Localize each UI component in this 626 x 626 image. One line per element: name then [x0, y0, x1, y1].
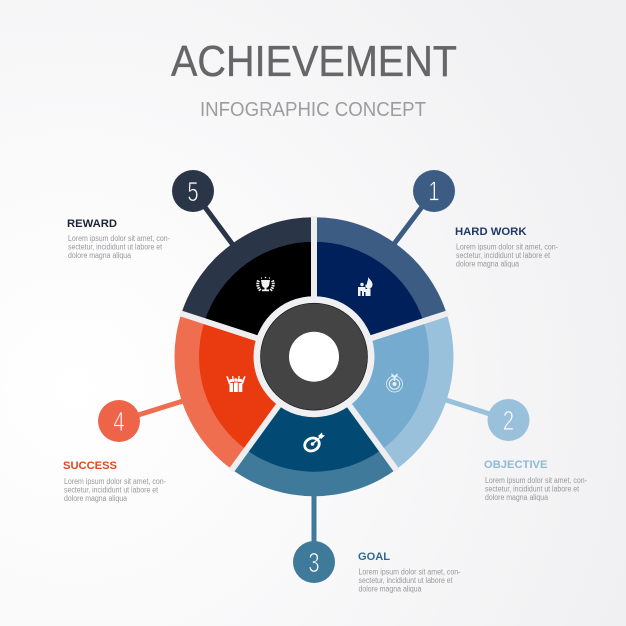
text block: objective: OBJECTIVE: [484, 459, 548, 471]
title: ACHIEVEMENT: [171, 37, 457, 86]
connector 3 with number badge: 3: [308, 548, 320, 579]
connector 4 with number badge: 4: [113, 407, 125, 438]
text block: goal: GOAL: [358, 551, 390, 563]
text block: hard work: Lorem ipsum dolor sit amet, con-: [456, 242, 558, 252]
text block: reward: [67, 218, 170, 260]
text block: reward: REWARD: [67, 218, 117, 230]
connector 2 with number badge: 2: [503, 406, 514, 437]
text block: reward: sectetur, incididunt ut labore et: [68, 242, 163, 252]
icon: trophy with laurels: [258, 277, 273, 291]
segment 5: reward: [181, 217, 314, 357]
segment 3: goal: [232, 357, 396, 496]
segment 2: objective: [314, 314, 453, 470]
icon: group raising arms: [226, 376, 246, 392]
text block: hard work: HARD WORK: [455, 226, 527, 238]
connector 2 with number badge: [446, 399, 530, 441]
center hub: [254, 296, 374, 417]
text block: goal: dolore magna aliqua: [358, 584, 422, 594]
connector 4 with number badge: [98, 400, 183, 442]
icon: person climbing with flame: [358, 277, 372, 296]
text block: goal: [358, 551, 461, 594]
text block: success: dolore magna aliqua: [64, 494, 127, 503]
icon: target arrow light: [386, 373, 402, 392]
icon: target with dart: [303, 432, 325, 453]
text block: success: Lorem ipsum dolor sit amet, con-: [64, 477, 166, 486]
text block: success: [63, 460, 166, 503]
text block: objective: [484, 459, 587, 502]
text block: objective: Lorem ipsum dolor sit amet, con-: [485, 476, 587, 485]
text block: hard work: [455, 226, 558, 268]
subtitle: INFOGRAPHIC CONCEPT: [200, 99, 426, 121]
connector 1 with number badge: [394, 170, 455, 244]
connector 1 with number badge: 1: [428, 176, 440, 207]
text block: objective: sectetur, incididunt ut labore et: [485, 484, 580, 494]
text block: reward: Lorem ipsum dolor sit amet, con-: [68, 234, 170, 243]
text block: objective: dolore magna aliqua: [485, 493, 548, 502]
text block: hard work: dolore magna aliqua: [456, 260, 519, 268]
text block: hard work: sectetur, incididunt ut labore et: [456, 251, 551, 260]
segment 4: success: [175, 314, 314, 470]
connector 5 with number badge: [172, 170, 233, 245]
text block: goal: sectetur, incididunt ut labore et: [358, 576, 453, 585]
text block: reward: dolore magna aliqua: [68, 251, 131, 260]
connector 5 with number badge: 5: [187, 177, 199, 208]
segment 1: hard work: [314, 217, 447, 357]
text block: success: SUCCESS: [63, 460, 117, 472]
text block: success: sectetur, incididunt ut labore et: [64, 486, 159, 494]
text block: goal: Lorem ipsum dolor sit amet, con-: [358, 568, 461, 576]
connector 3 with number badge: [293, 494, 335, 583]
donut chart: [175, 216, 453, 496]
